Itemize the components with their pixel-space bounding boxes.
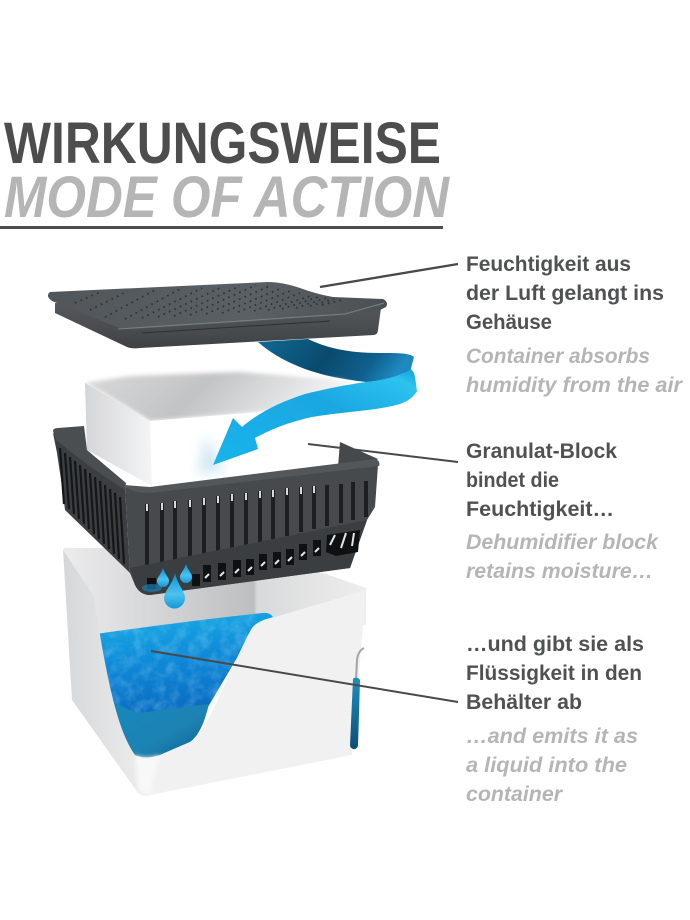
water texture <box>96 613 262 713</box>
basket right back post <box>338 442 378 467</box>
text block: air humidity English: humidity from the air <box>466 374 684 397</box>
text block: liquid English: container <box>466 783 564 806</box>
arrow shadow <box>198 435 225 474</box>
title: WIRKUNGSWEISE: WIRKUNGSWEISE <box>4 111 441 176</box>
text block: granulate English: retains moisture… <box>466 560 653 583</box>
water front face <box>105 698 209 759</box>
tube liquid <box>350 678 360 749</box>
text block: granulate German: Feuchtigkeit… <box>466 498 614 521</box>
lid side <box>55 303 381 348</box>
block left face <box>85 383 152 486</box>
lid edge highlight <box>118 303 384 329</box>
text block: granulate English <box>466 531 659 583</box>
leader line: block <box>308 444 458 462</box>
small drop right <box>180 564 192 583</box>
leader line: lid <box>320 264 458 287</box>
lid top <box>48 282 387 329</box>
text block: granulate German: bindet die <box>466 469 559 492</box>
block right face <box>150 405 345 486</box>
basket bottom band <box>130 520 367 595</box>
leader line: water <box>151 651 458 702</box>
icon: water drops <box>157 564 192 609</box>
basket front slots <box>147 481 366 568</box>
basket left slots <box>60 448 124 564</box>
text block: liquid English: …and emits it as <box>466 725 638 748</box>
container lower rim <box>135 755 160 795</box>
text block: air humidity German: der Luft gelangt ins <box>466 282 664 305</box>
text block: air humidity German: Feuchtigkeit aus <box>466 253 631 276</box>
basket slot highlights <box>147 486 314 511</box>
block top <box>85 372 410 421</box>
subtitle: MODE OF ACTION: MODE OF ACTION <box>4 165 450 230</box>
text block: liquid German: Flüssigkeit in den <box>466 662 642 685</box>
basket window highlights <box>205 533 354 578</box>
basket <box>53 426 380 595</box>
container <box>63 548 366 796</box>
tube glass <box>356 648 364 680</box>
text block: granulate German <box>466 440 617 521</box>
text block: liquid German: …und gibt sie als <box>466 633 644 656</box>
basket blue tint <box>142 584 162 592</box>
icon: air flow arrow, front ribbon <box>213 369 417 465</box>
lid perforation <box>75 285 342 319</box>
text block: liquid English: a liquid into the <box>466 754 627 777</box>
text block: liquid English <box>466 725 638 806</box>
container front shell <box>135 590 366 796</box>
text block: granulate English: Dehumidifier block <box>466 531 659 554</box>
water level surface <box>96 613 273 716</box>
icon: air flow arrow, back ribbon <box>258 339 414 382</box>
text block: air humidity German: Gehäuse <box>466 311 552 334</box>
container back wall <box>63 548 366 640</box>
lid <box>48 282 387 348</box>
text block: air humidity English: Container absorbs <box>466 345 650 368</box>
text block: air humidity German <box>466 253 664 334</box>
text block: granulate German: Granulat-Block <box>466 440 617 463</box>
level indicator tube <box>350 648 364 749</box>
basket rim <box>124 459 380 493</box>
basket back rim <box>53 426 126 490</box>
heading rule <box>0 226 443 229</box>
large drop <box>164 573 185 609</box>
container left face <box>63 550 150 796</box>
basket front face <box>125 465 378 595</box>
text block: liquid German: Behälter ab <box>466 691 582 714</box>
basket bottom windows <box>147 530 360 589</box>
dehumidifier block <box>85 372 410 486</box>
text block: air humidity English <box>466 345 684 397</box>
small drop left <box>157 568 169 587</box>
text block: liquid German <box>466 633 644 714</box>
basket left face <box>53 433 130 573</box>
